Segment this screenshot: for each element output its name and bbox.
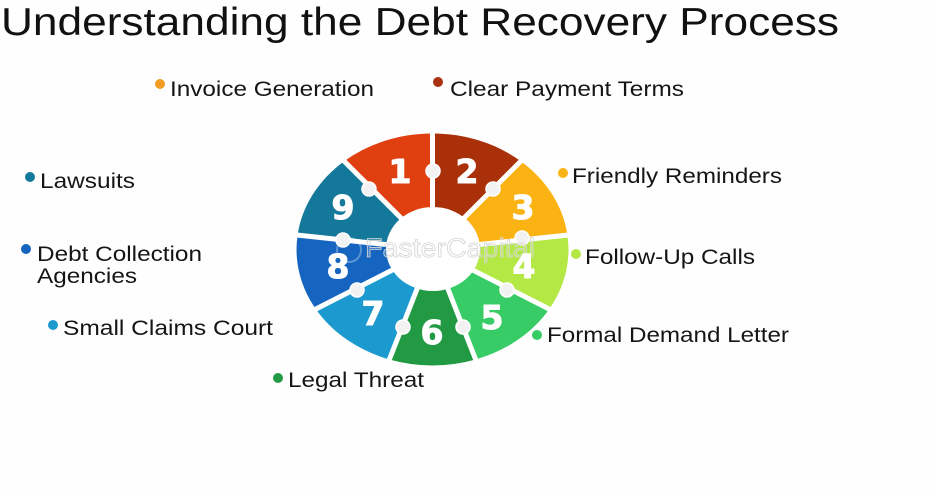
watermark: FasterCapital bbox=[365, 233, 535, 263]
segment 2 bbox=[432, 133, 521, 250]
step numbers: 7 bbox=[362, 294, 384, 333]
label: Invoice Generation: Invoice Generation bbox=[170, 77, 374, 101]
label: Follow-Up Calls: Follow-Up Calls bbox=[585, 245, 755, 269]
segment 5 bbox=[432, 250, 549, 360]
label: Formal Demand Letter: Formal Demand Letter bbox=[547, 323, 789, 347]
step numbers: 3 bbox=[512, 188, 534, 227]
segment 6 bbox=[389, 250, 476, 365]
label: Legal Threat: Legal Threat bbox=[288, 368, 424, 392]
label: Friendly Reminders: Friendly Reminders bbox=[572, 164, 782, 188]
step numbers: 2 bbox=[456, 152, 478, 191]
step numbers: 8 bbox=[327, 247, 349, 286]
title: Understanding the Debt Recovery Process bbox=[1, 1, 839, 44]
segment 9 bbox=[298, 161, 432, 250]
segment 4 bbox=[432, 235, 568, 309]
segment 8 bbox=[297, 235, 432, 309]
step numbers: 9 bbox=[332, 188, 354, 227]
label: Debt Collection Agencies bbox=[21, 242, 202, 288]
label: Clear Payment Terms: Clear Payment Terms bbox=[450, 77, 684, 101]
segment 3 bbox=[432, 161, 567, 250]
chart: nine-step recovery wheel bbox=[292, 128, 573, 365]
step numbers: 6 bbox=[421, 313, 443, 352]
label: Lawsuits: Lawsuits bbox=[40, 169, 135, 193]
label: Small Claims Court: Small Claims Court bbox=[63, 316, 273, 340]
step numbers: 4 bbox=[513, 247, 535, 286]
segment 7 bbox=[316, 250, 432, 360]
segment 1 bbox=[344, 133, 432, 250]
connector nodes bbox=[336, 164, 529, 334]
label: Debt Collection Agencies: Debt Collection bbox=[37, 242, 202, 266]
center hole bbox=[386, 207, 480, 291]
step numbers: 5 bbox=[481, 298, 503, 337]
step numbers bbox=[327, 152, 535, 352]
label: Debt Collection Agencies: Agencies bbox=[37, 264, 137, 288]
step numbers: 1 bbox=[389, 152, 411, 191]
